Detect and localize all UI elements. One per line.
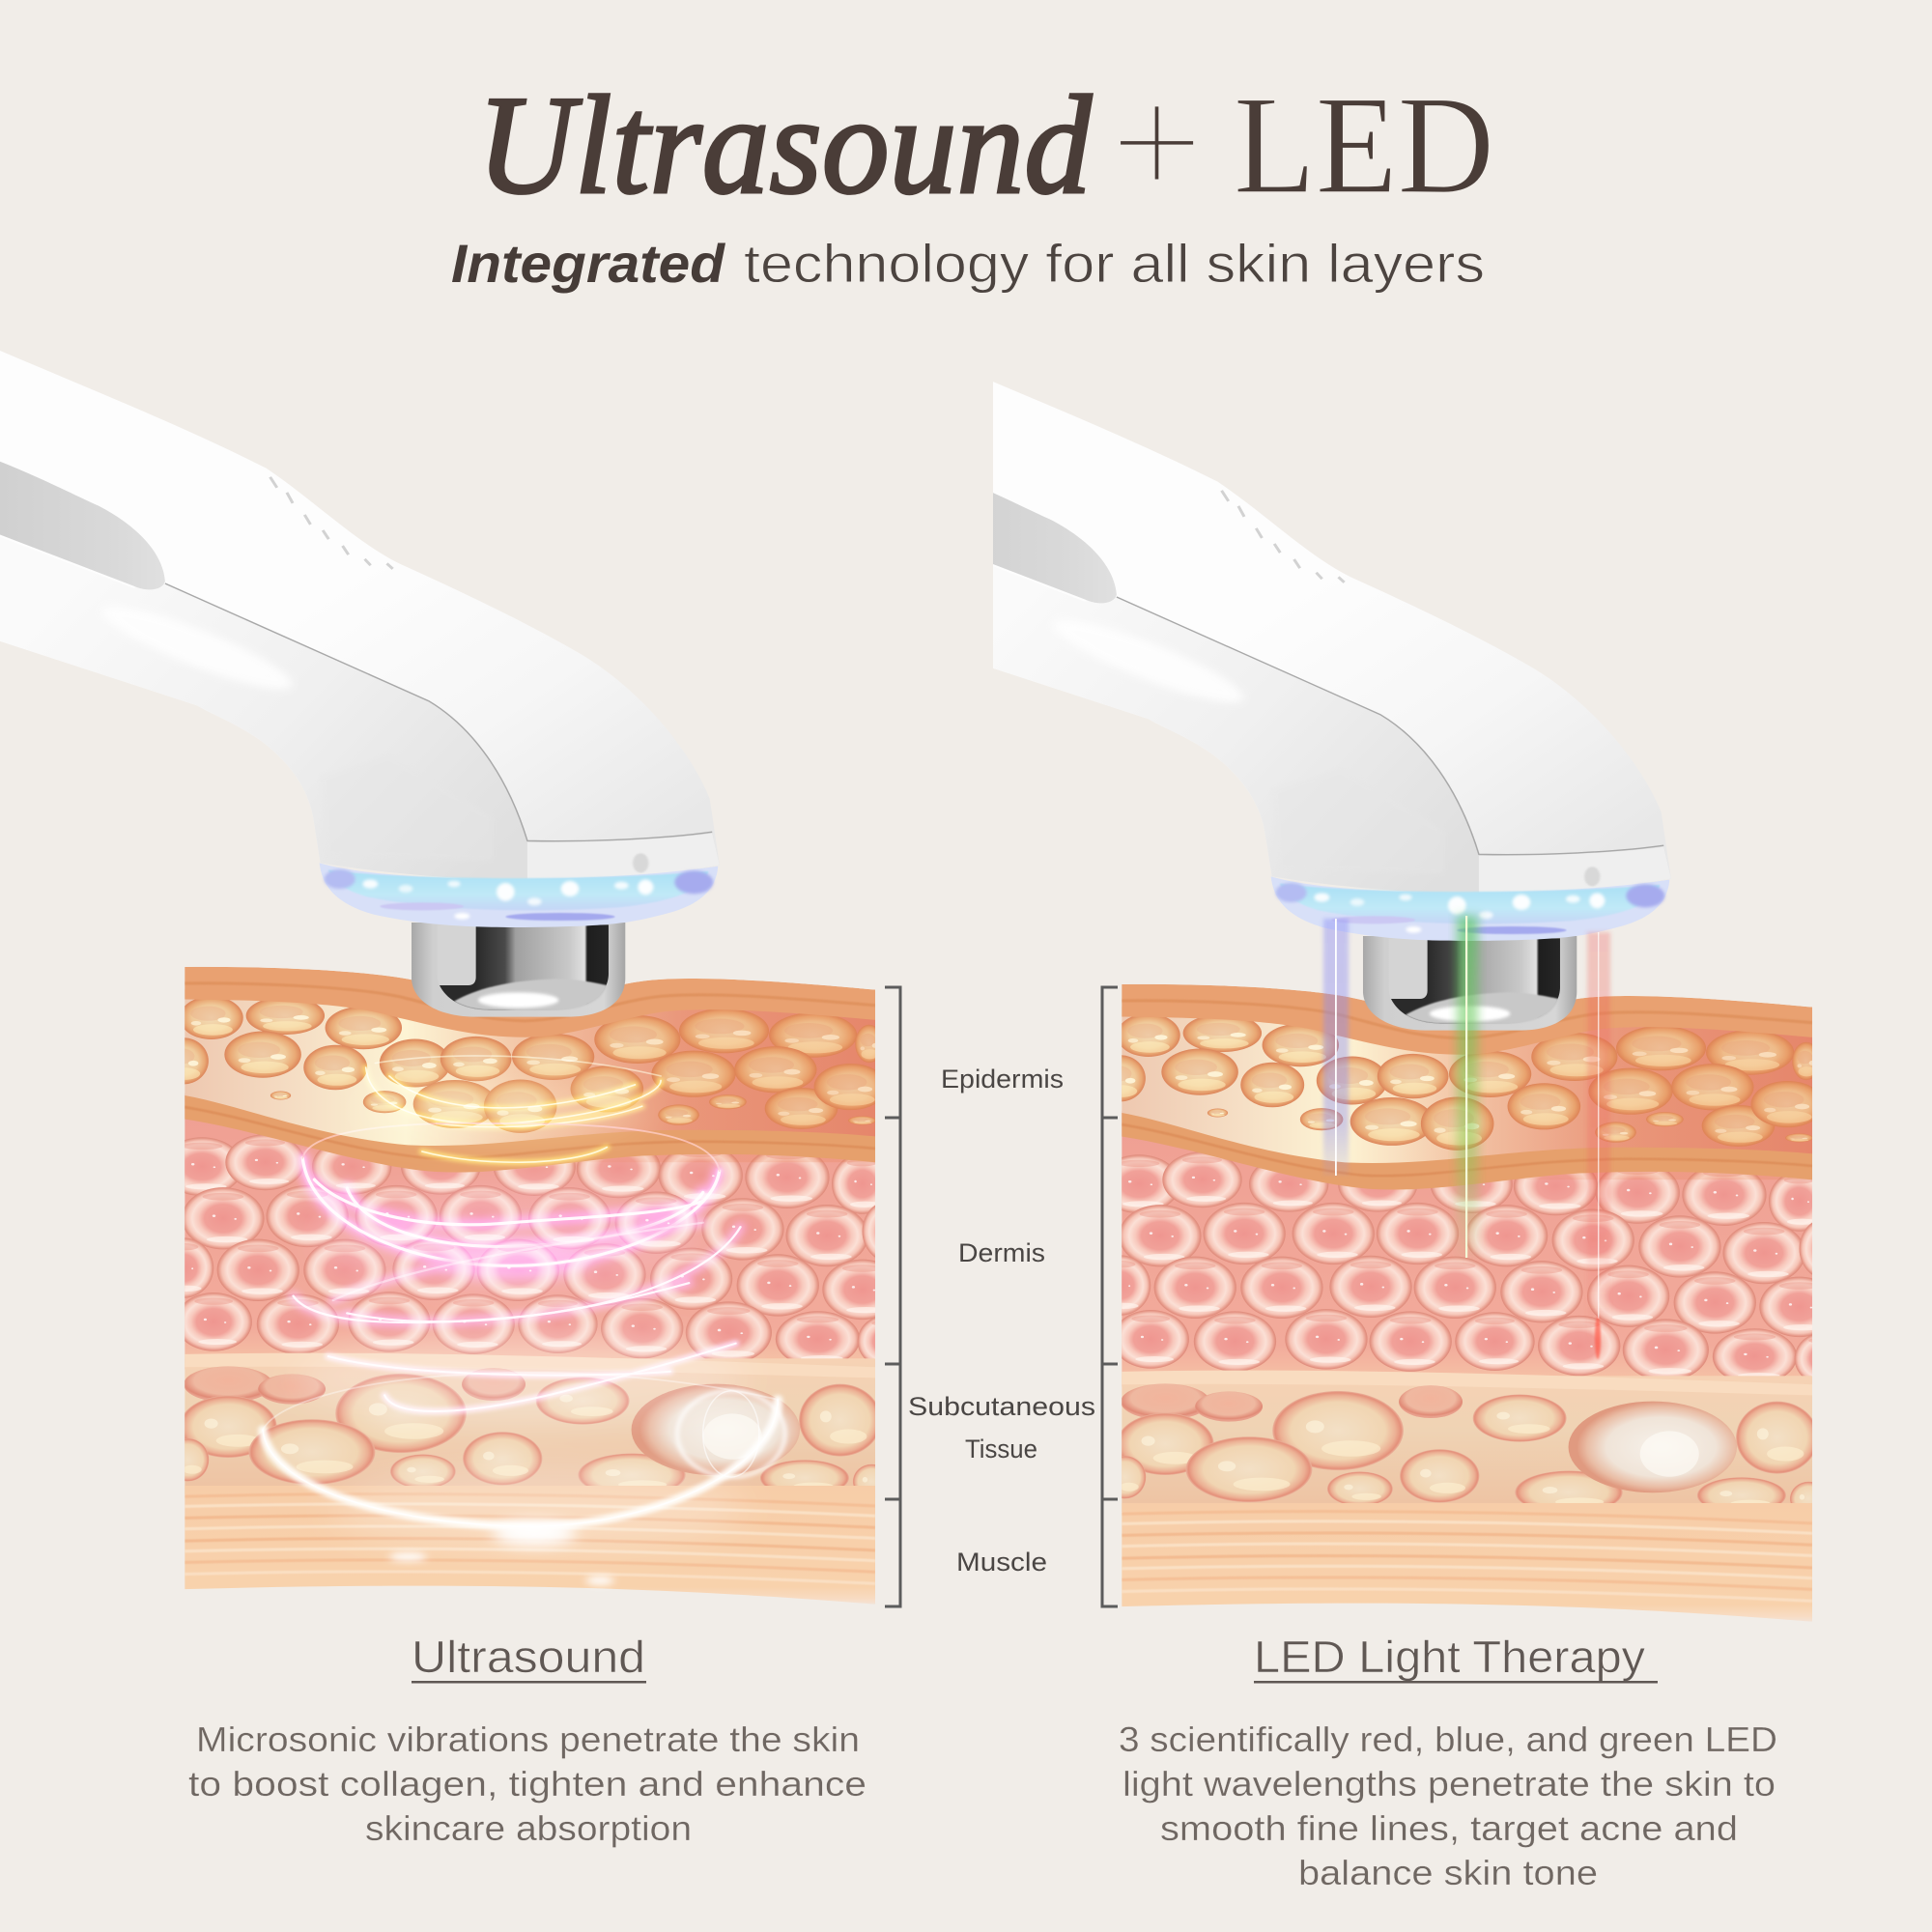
red beam (1587, 932, 1610, 1359)
subtitle (451, 233, 1485, 294)
bracket: left skin layers (885, 987, 900, 1606)
subtitle: Integrated (451, 233, 726, 294)
skin cross-section: right (1090, 984, 1856, 1624)
pink rings (294, 1123, 740, 1411)
text: LED description: balance skin tone (1298, 1853, 1598, 1892)
green beam (1457, 916, 1478, 1258)
device: LED handset (952, 364, 1671, 1031)
panel: LED light therapy (993, 382, 1812, 1621)
skin cross-section: left (153, 967, 919, 1606)
panel: ultrasound (0, 351, 919, 1606)
ultrasound wave rings (263, 1056, 785, 1585)
layer labels: Dermis (958, 1238, 1045, 1267)
heading: LED light therapy: LED Light Therapy (1254, 1632, 1645, 1682)
layer labels: Subcutaneous (908, 1392, 1095, 1421)
text: ultrasound description: skincare absorption (365, 1808, 692, 1848)
text: LED description: smooth fine lines, target acne and (1160, 1808, 1738, 1848)
device: ultrasound handset (0, 351, 720, 1017)
title: Ultrasound (477, 67, 1093, 223)
layer labels: Muscle (956, 1548, 1047, 1577)
text: LED description (1119, 1719, 1777, 1892)
gold rings (366, 1056, 661, 1162)
white rings (263, 1373, 785, 1585)
heading: ultrasound: Ultrasound (412, 1632, 645, 1682)
blue beam (1323, 919, 1349, 1176)
layer labels: Epidermis (941, 1065, 1064, 1094)
light beams (1323, 916, 1610, 1359)
text: LED description: 3 scientifically red, blue, and green LED (1119, 1719, 1777, 1759)
subtitle: technology for all skin layers (744, 233, 1485, 294)
title: LED (1234, 67, 1494, 223)
layer labels (908, 1065, 1095, 1577)
text: ultrasound description (188, 1719, 867, 1848)
text: ultrasound description: Microsonic vibrations penetrate the skin (196, 1719, 860, 1759)
soft haze (296, 1080, 745, 1550)
text: ultrasound description: to boost collagen, tighten and enhance (188, 1764, 867, 1804)
title (477, 51, 1494, 235)
text: LED description: light wavelengths penetrate the skin to (1122, 1764, 1776, 1804)
bracket: right skin layers (1102, 987, 1118, 1606)
layer labels: Tissue (965, 1435, 1037, 1463)
title: + (1110, 51, 1204, 235)
